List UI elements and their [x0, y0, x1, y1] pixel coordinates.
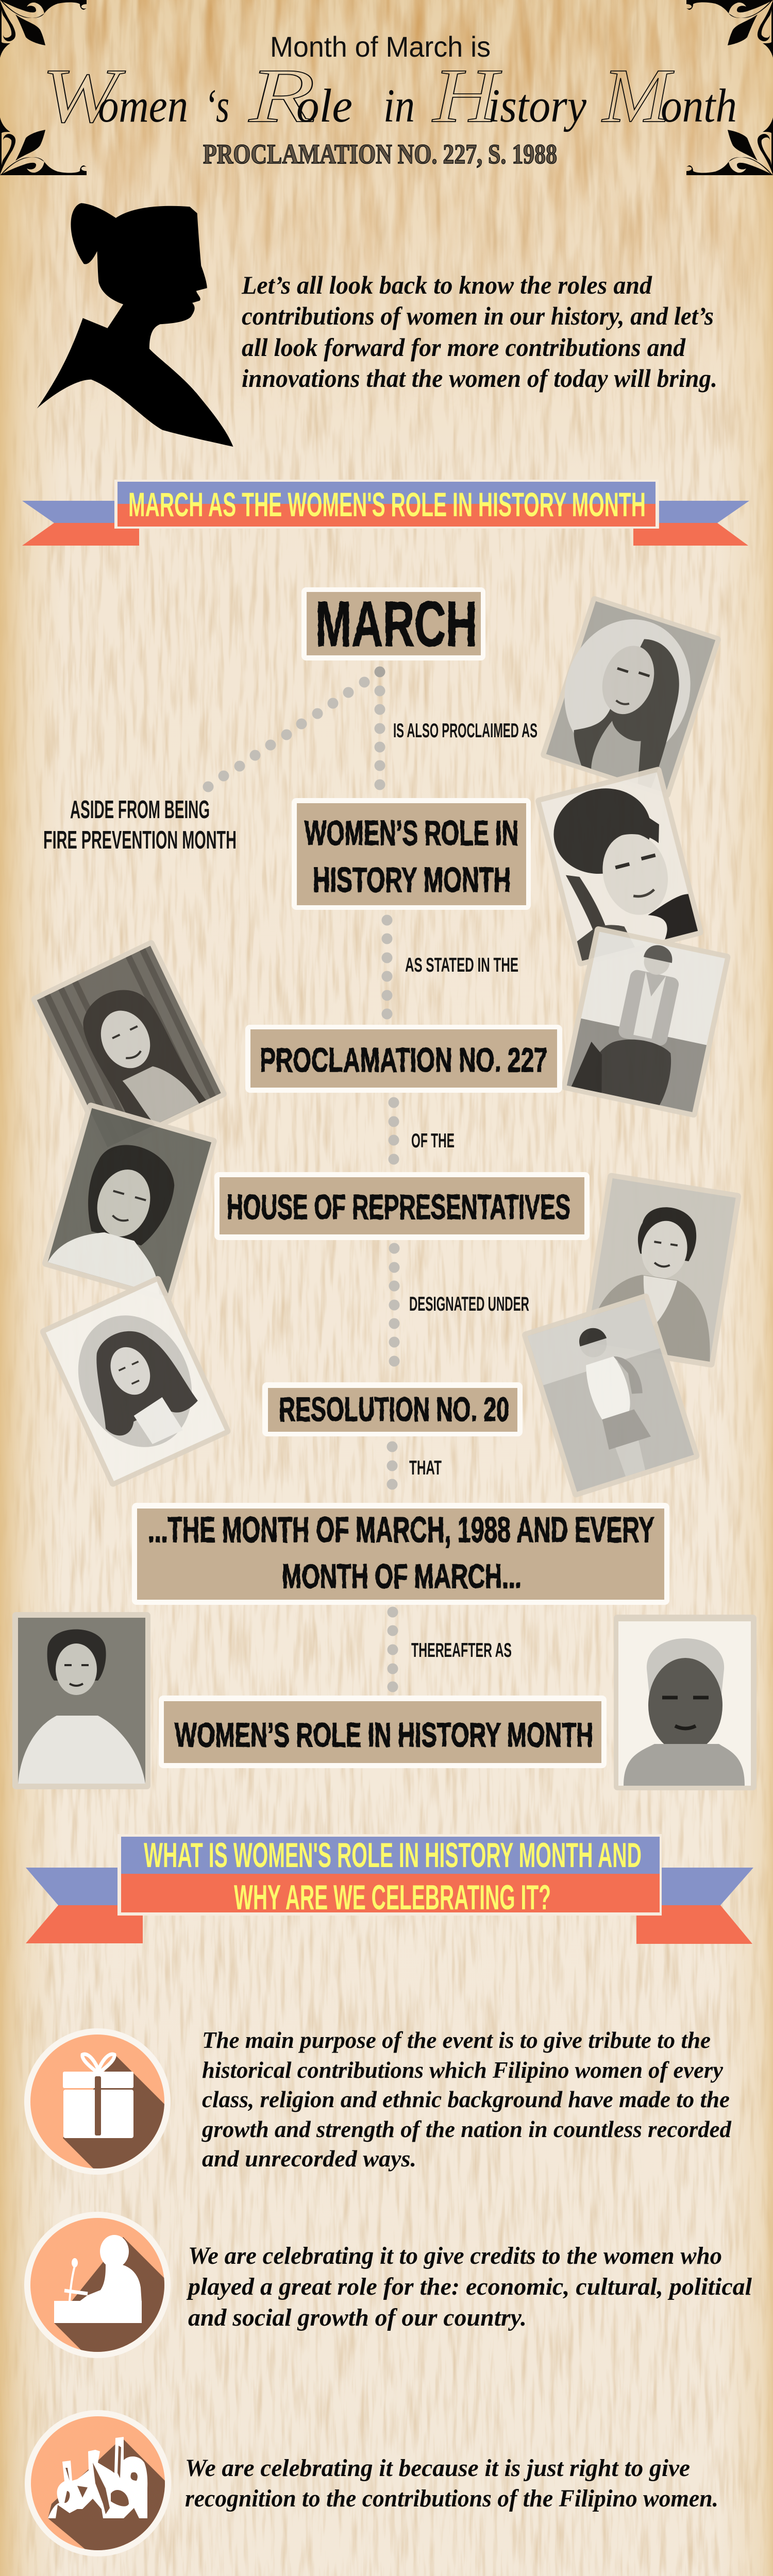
- text: main purpose: and unrecorded ways.: [202, 2145, 416, 2172]
- main script title: ole: [296, 79, 352, 132]
- text: just right: recognition to the contributions of the Filipino women.: [185, 2485, 718, 2512]
- box: march: [301, 587, 485, 660]
- box: women's role in history month: [292, 798, 531, 910]
- label: as stated in the: AS STATED IN THE: [405, 954, 518, 976]
- photo: sketch of elderly woman: [614, 1615, 757, 1790]
- box: house of representatives: [214, 1172, 590, 1240]
- photo: woman with bouffant hair: [535, 766, 704, 967]
- dotted connector: [386, 1442, 398, 1490]
- box: the month of march 1988: MONTH OF MARCH...: [282, 1557, 522, 1595]
- main script title: R: [248, 53, 315, 139]
- icon: protesting crowd: [25, 2410, 171, 2556]
- text: main purpose: The main purpose of the event is to give tribute to the: [202, 2027, 711, 2053]
- main script title: onth: [661, 79, 737, 132]
- icon: woman silhouette: [37, 203, 233, 447]
- label: aside from being fire prevention month: ASIDE FROM BEING: [70, 796, 210, 824]
- label: aside from being fire prevention month: [43, 796, 237, 854]
- text: main purpose: class, religion and ethnic background have made to the: [202, 2086, 730, 2112]
- dotted connector: [389, 1243, 400, 1366]
- dotted connector: diagonal and vertical: [203, 667, 385, 792]
- box: proclamation no. 227: [245, 1025, 562, 1093]
- label: thereafter as: THEREAFTER AS: [411, 1639, 512, 1662]
- box: march: MARCH: [315, 589, 477, 660]
- text: main purpose: growth and strength of the nation in countless recorded: [201, 2116, 732, 2142]
- dotted connector: [381, 915, 393, 1019]
- photo: woman in white lace: [12, 1612, 150, 1789]
- label: that: THAT: [409, 1457, 442, 1479]
- text: main purpose: historical contributions which Filipino women of every: [202, 2057, 724, 2083]
- corner ornaments: [0, 0, 773, 175]
- label: of the: OF THE: [411, 1130, 455, 1152]
- dotted connector: [388, 1606, 398, 1692]
- intro paragraph: Let’s all look back to know the roles and: [241, 270, 652, 299]
- photo: oval drawing of woman: [39, 1275, 232, 1488]
- main script title: H: [432, 53, 502, 139]
- photo: smiling woman in dark dress: [30, 939, 228, 1154]
- main script title: W: [42, 53, 126, 139]
- box: women's role in history month: WOMEN’S ROLE IN: [305, 814, 518, 853]
- text: just right: [185, 2454, 718, 2512]
- box: resolution no. 20: RESOLUTION NO. 20: [279, 1390, 509, 1428]
- text: giving credits: [186, 2242, 752, 2331]
- proclamation line: PROCLAMATION NO. 227, S. 1988: [203, 139, 557, 170]
- main script title: M: [601, 53, 674, 139]
- banner: what is women's role: [26, 1834, 753, 1944]
- main script title: [42, 53, 737, 139]
- subtitle: month of march is: Month of March is: [270, 30, 491, 63]
- intro paragraph: [241, 270, 717, 393]
- text: just right: We are celebrating it because it is just right to give: [185, 2454, 690, 2482]
- flow diagram: march to proclamation: [43, 587, 669, 1768]
- icon: gift: [24, 2028, 171, 2175]
- box: house of representatives: HOUSE OF REPRESENTATIVES: [227, 1188, 570, 1227]
- box: women's role final: WOMEN’S ROLE IN HISTORY MONTH: [175, 1716, 593, 1754]
- box: proclamation no. 227: PROCLAMATION NO. 227: [260, 1041, 547, 1079]
- photo: woman with braided headband: [540, 595, 722, 799]
- box: women's role final: [159, 1696, 607, 1768]
- label: is also proclaimed as: IS ALSO PROCLAIMED AS: [393, 720, 537, 742]
- label: designated under: DESIGNATED UNDER: [409, 1293, 529, 1315]
- main script title: istory: [488, 79, 586, 132]
- text: giving credits: played a great role for the: economic, cultural, political: [186, 2273, 752, 2300]
- title block: [42, 30, 737, 170]
- photo: woman in filipiniana dress: [581, 1173, 742, 1368]
- box: resolution no. 20: [262, 1382, 523, 1436]
- text: giving credits: and social growth of our country.: [188, 2304, 527, 2331]
- box: women's role in history month: HISTORY MONTH: [313, 860, 511, 900]
- intro paragraph: contributions of women in our history, and let’s: [242, 301, 714, 330]
- main script title: in: [383, 79, 415, 132]
- intro paragraph: all look forward for more contributions and: [242, 333, 686, 362]
- banner: what is women's role: WHY ARE WE CELEBRATING IT?: [234, 1878, 551, 1917]
- intro paragraph: innovations that the women of today will bring.: [242, 364, 717, 393]
- photo: woman on horseback: [561, 926, 731, 1118]
- dotted connector: [389, 1097, 399, 1164]
- photo: athlete woman: [521, 1293, 700, 1498]
- photo: elderly woman portrait: [41, 1102, 217, 1303]
- main script title: omen: [98, 79, 188, 132]
- icon: speaker at podium: [24, 2212, 171, 2358]
- label: aside from being fire prevention month: FIRE PREVENTION MONTH: [43, 826, 237, 854]
- banner: march as the women's role: [22, 480, 749, 546]
- box: the month of march 1988: [132, 1503, 669, 1605]
- text: giving credits: We are celebrating it to give credits to the women who: [188, 2242, 722, 2269]
- main script title: ‘s: [205, 79, 229, 132]
- text: main purpose: [201, 2027, 732, 2172]
